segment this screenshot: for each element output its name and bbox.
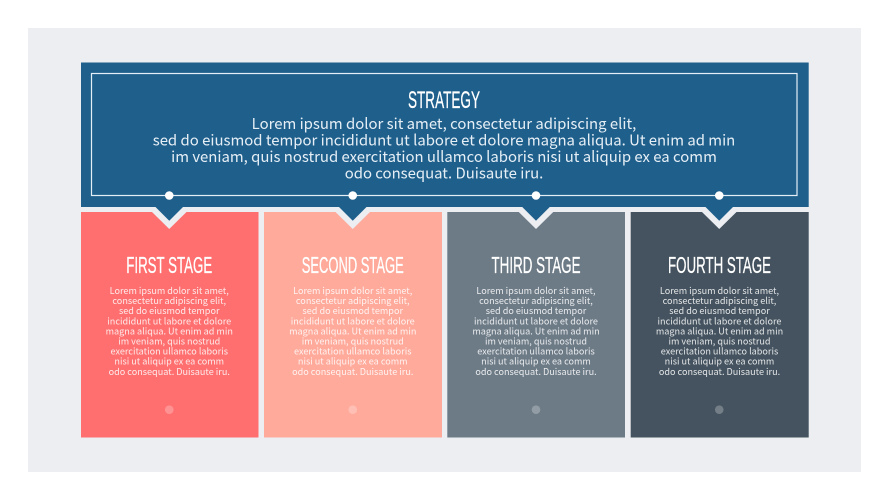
heading: fourth stage: FOURTH STAGE — [668, 252, 771, 278]
text block: fourth stage: im veniam, quis nostrud — [668, 334, 771, 348]
text block: fourth stage — [656, 283, 783, 378]
text block: strategy — [153, 113, 735, 184]
text block: third stage: incididunt ut labore et dolore — [474, 313, 598, 327]
text block: first stage: consectetur adipiscing elit, — [112, 293, 226, 307]
text block: second stage: consectetur adipiscing elit, — [296, 293, 410, 307]
panel: fourth stage — [631, 212, 809, 438]
text block: fourth stage: exercitation ullamco laboris — [661, 344, 778, 358]
text block: second stage: exercitation ullamco laboris — [294, 344, 411, 358]
text block: first stage: magna aliqua. Ut enim ad min — [106, 323, 233, 337]
text block: first stage: odo consequat. Duisaute iru. — [109, 364, 230, 378]
heading: third stage: THIRD STAGE — [492, 252, 580, 278]
heading: first stage: FIRST STAGE — [126, 252, 212, 278]
text block: fourth stage: Lorem ipsum dolor sit amet, — [660, 283, 779, 297]
text block: strategy: odo consequat. Duisaute iru. — [345, 162, 543, 184]
text block: first stage: im veniam, quis nostrud — [118, 334, 220, 348]
text block: second stage: sed do eiusmod tempor — [302, 303, 403, 317]
text block: third stage: im veniam, quis nostrud — [485, 334, 587, 348]
panel: third stage — [447, 212, 625, 438]
text block: first stage: Lorem ipsum dolor sit amet, — [110, 283, 229, 297]
text block: fourth stage: sed do eiusmod tempor — [669, 303, 770, 317]
text block: second stage: Lorem ipsum dolor sit amet, — [293, 283, 412, 297]
text block: fourth stage: consectetur adipiscing elit, — [663, 293, 776, 307]
text block: first stage — [106, 283, 233, 378]
text block: third stage: exercitation ullamco laboris — [477, 344, 595, 358]
panel: first stage — [81, 212, 258, 438]
text block: third stage: odo consequat. Duisaute iru. — [475, 364, 597, 378]
text block: fourth stage: odo consequat. Duisaute iru. — [659, 364, 780, 378]
text block: fourth stage: nisi ut aliquip ex ea comm — [665, 354, 774, 368]
text block: second stage — [289, 283, 416, 378]
text block: third stage: nisi ut aliquip ex ea comm — [481, 354, 591, 368]
text block: third stage: sed do eiusmod tempor — [486, 303, 587, 317]
text block: strategy: Lorem ipsum dolor sit amet, consectetur adipiscing elit, — [252, 113, 636, 134]
text block: strategy: sed do eiusmod tempor incididunt ut labore et dolore magna aliqua. Ut enim ad min — [153, 130, 735, 150]
text block: strategy: im veniam, quis nostrud exercitation ullamco laboris nisi ut aliquip ex ea comm — [171, 146, 717, 167]
text block: second stage: im veniam, quis nostrud — [302, 334, 404, 348]
text block: third stage — [472, 283, 600, 378]
panel: strategy — [81, 62, 809, 221]
text block: first stage: incididunt ut labore et dolore — [107, 313, 231, 327]
text block: first stage: exercitation ullamco laboris — [111, 344, 228, 358]
text block: second stage: nisi ut aliquip ex ea comm — [298, 354, 408, 368]
text block: fourth stage: incididunt ut labore et dolore — [658, 313, 781, 327]
text block: second stage: incididunt ut labore et dolore — [291, 313, 415, 327]
text block: third stage: magna aliqua. Ut enim ad min — [472, 323, 600, 337]
text block: third stage: consectetur adipiscing elit, — [479, 293, 593, 307]
text block: second stage: magna aliqua. Ut enim ad min — [289, 323, 416, 337]
text block: fourth stage: magna aliqua. Ut enim ad min — [656, 323, 783, 337]
heading: strategy: STRATEGY — [408, 87, 480, 114]
panel: second stage — [264, 212, 442, 438]
heading: second stage: SECOND STAGE — [302, 252, 404, 278]
text block: first stage: nisi ut aliquip ex ea comm — [114, 354, 224, 368]
text block: first stage: sed do eiusmod tempor — [119, 303, 220, 317]
text block: third stage: Lorem ipsum dolor sit amet, — [476, 283, 596, 297]
text block: second stage: odo consequat. Duisaute iru. — [292, 364, 413, 378]
